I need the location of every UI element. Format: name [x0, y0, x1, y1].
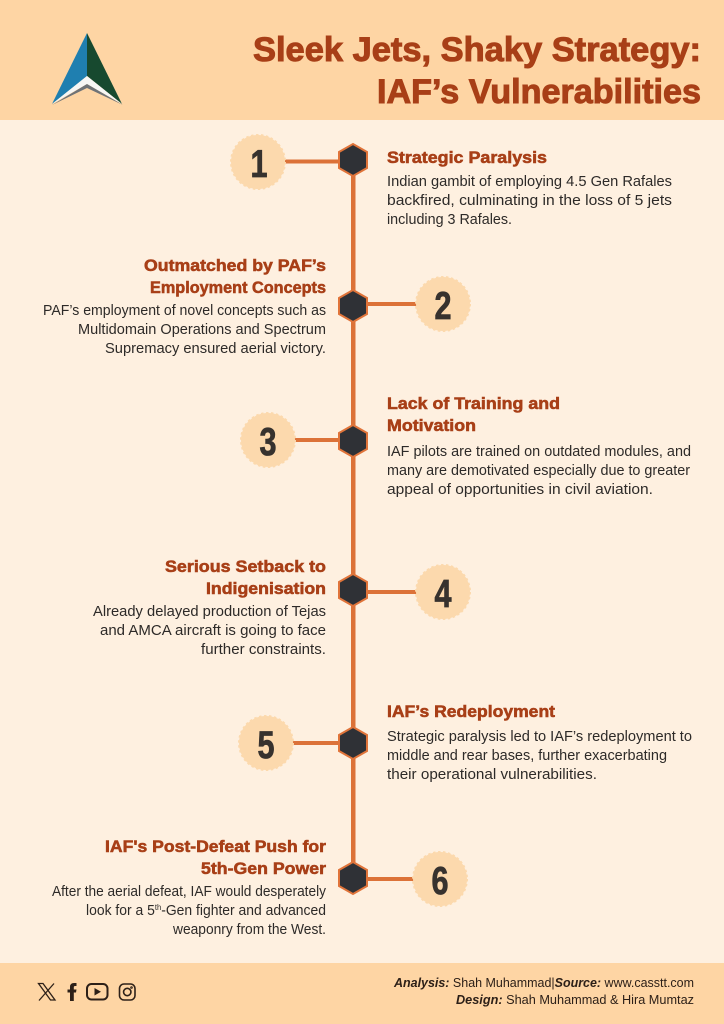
- timeline spine: [351, 160, 356, 880]
- footer credits: Analysis: Shah Muhammad|Source: www.casstt.com: [393, 975, 694, 990]
- icon: Facebook: [68, 983, 76, 1001]
- icon: Instagram: [120, 984, 135, 1000]
- step 4 text: Indigenisation: [206, 580, 326, 598]
- step 3 text: appeal of opportunities in civil aviation.: [387, 482, 653, 498]
- icon: arrowhead logo: [52, 33, 123, 105]
- step 6 marker: 6: [432, 860, 448, 903]
- step 5 marker: [239, 716, 367, 770]
- step 5 marker: 5: [258, 724, 274, 767]
- step 2 text: [43, 257, 326, 357]
- step 1 marker: 1: [250, 143, 268, 186]
- step 3 text: [387, 395, 691, 498]
- step 6 text: th: [155, 903, 161, 912]
- step 2 text: Supremacy ensured aerial victory.: [105, 341, 326, 357]
- step 4 text: Serious Setback to: [165, 558, 326, 576]
- step 1 text: [387, 149, 672, 228]
- step 4 text: further constraints.: [201, 642, 326, 658]
- step 1 text: backfired, culminating in the loss of 5 jets: [387, 193, 672, 209]
- step 6 text: [52, 838, 327, 938]
- title: Sleek Jets, Shaky Strategy:: [253, 31, 701, 69]
- step 6 text: IAF's Post-Defeat Push for: [105, 838, 327, 856]
- step 3 text: Lack of Training and: [387, 395, 560, 413]
- step 4 marker: 4: [434, 573, 452, 616]
- step 6 text: weaponry from the West.: [172, 922, 326, 938]
- step 2 text: PAF’s employment of novel concepts such as: [43, 303, 326, 319]
- step 3 text: Motivation: [387, 417, 476, 435]
- step 6 text: look for a 5: [86, 903, 158, 919]
- step 3 text: IAF pilots are trained on outdated modules, and: [387, 444, 691, 460]
- footer credits: [393, 975, 694, 1007]
- title: IAF’s Vulnerabilities: [377, 73, 701, 111]
- icon: YouTube: [87, 984, 108, 1000]
- step 5 text: Strategic paralysis led to IAF’s redeployment to: [387, 729, 692, 745]
- header band: [0, 0, 724, 120]
- step 6 text: After the aerial defeat, IAF would desperately: [52, 884, 327, 900]
- step 5 text: [387, 703, 692, 783]
- step 5 text: IAF’s Redeployment: [387, 703, 556, 721]
- step 2 text: Outmatched by PAF’s: [144, 257, 326, 275]
- footer band: [0, 963, 724, 1024]
- step 2 text: Employment Concepts: [150, 279, 326, 297]
- step 4 text: [93, 558, 326, 658]
- icon: X: [38, 984, 55, 1000]
- step 1 text: Indian gambit of employing 4.5 Gen Rafales: [387, 174, 672, 190]
- step 5 text: their operational vulnerabilities.: [387, 767, 597, 783]
- step 6 text: -Gen fighter and advanced: [161, 903, 326, 919]
- step 4 text: and AMCA aircraft is going to face: [100, 623, 326, 639]
- step 3 text: many are demotivated especially due to greater: [387, 463, 690, 479]
- step 4 text: Already delayed production of Tejas: [93, 604, 326, 620]
- title: [253, 31, 701, 111]
- footer credits: Design: Shah Muhammad & Hira Mumtaz: [456, 992, 694, 1007]
- step 2 text: Multidomain Operations and Spectrum: [78, 322, 326, 338]
- step 3 marker: [241, 413, 367, 467]
- step 1 text: Strategic Paralysis: [387, 149, 547, 167]
- step 6 text: 5th-Gen Power: [201, 860, 327, 878]
- step 5 text: middle and rear bases, further exacerbating: [387, 748, 667, 764]
- step 4 marker: [339, 565, 470, 619]
- step 1 text: including 3 Rafales.: [387, 212, 512, 228]
- step 2 marker: 2: [434, 285, 452, 328]
- step 2 marker: [339, 277, 470, 331]
- step 6 marker: [339, 852, 467, 906]
- step 3 marker: 3: [260, 421, 276, 464]
- step 1 marker: [231, 135, 367, 189]
